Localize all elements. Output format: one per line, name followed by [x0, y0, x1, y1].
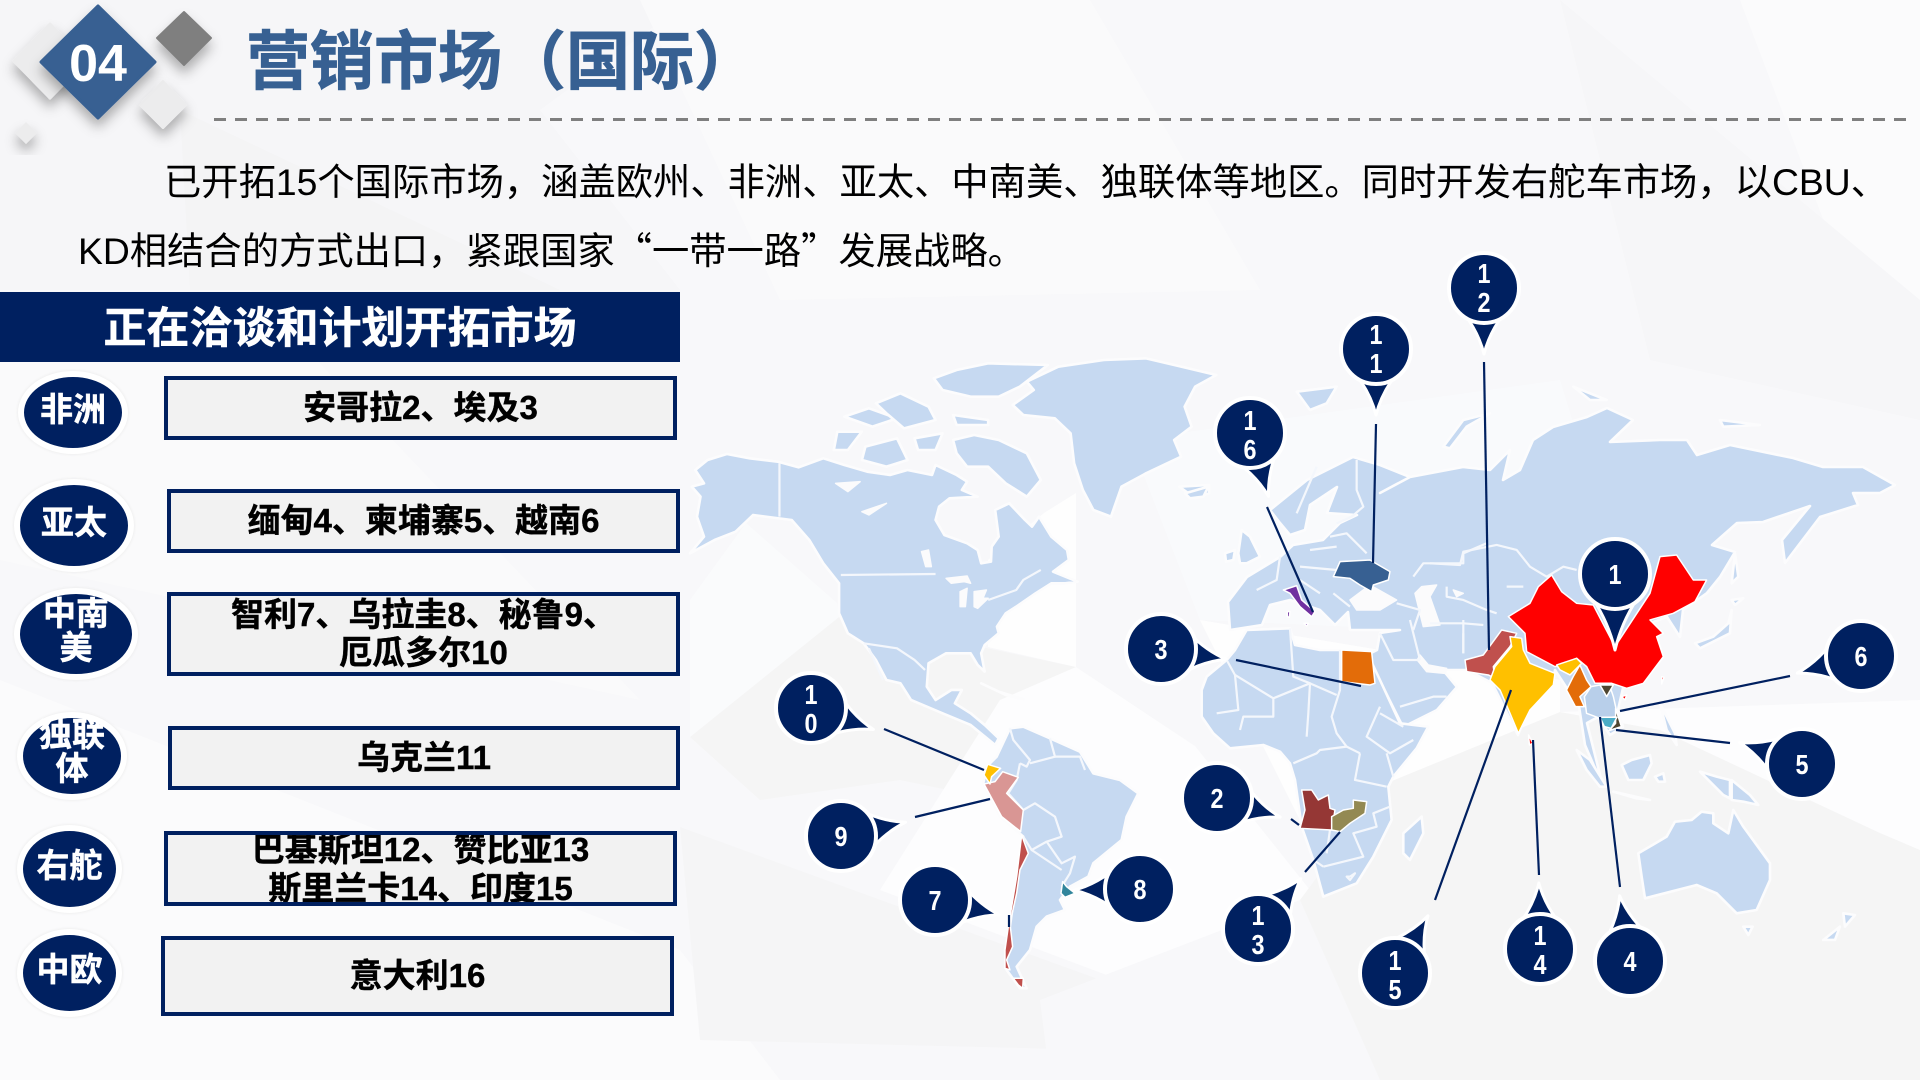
pin 10: 1: [804, 679, 818, 710]
leader lines: [884, 362, 1790, 927]
pin 12: 1: [1478, 258, 1490, 289]
row: Africa label: [18, 371, 128, 454]
pin 10: 0: [804, 708, 818, 739]
pin 9: 9: [834, 821, 848, 852]
land: North America and Greenland: [690, 358, 1216, 745]
row: China-Europe markets: 意大利16: [350, 957, 485, 994]
panel header: [0, 292, 680, 362]
pin 13: [1223, 859, 1324, 964]
pin 3: 3: [1154, 634, 1168, 665]
pin 2: 2: [1210, 783, 1224, 814]
row: Africa markets: 安哥拉2、埃及3: [303, 389, 538, 426]
lakes of North America: [836, 482, 988, 608]
pin 7: [900, 865, 1006, 944]
pin 5: 5: [1796, 749, 1808, 780]
land: Japan and east Asian islands: [1573, 387, 1760, 648]
pin 10: [776, 673, 883, 758]
pin 11: 1: [1370, 319, 1382, 350]
row: China-Europe label: 中欧: [36, 951, 102, 988]
country borders: [1217, 620, 1463, 880]
intro paragraph: [78, 161, 1888, 275]
pin 13: 3: [1252, 929, 1264, 960]
pin 14: [1505, 882, 1575, 984]
pin 6: 6: [1854, 641, 1868, 672]
row: Asia Pacific label: 亚太: [41, 504, 107, 540]
row: CIS label: 独联: [39, 716, 105, 753]
row: Asia Pacific markets: 缅甸4、柬埔寨5、越南6: [247, 502, 600, 539]
row: Latin America label: 中南: [43, 595, 109, 632]
pin 7: 7: [928, 885, 942, 916]
world map: [690, 358, 1895, 988]
pin 15: [1360, 901, 1454, 1008]
intro paragraph: 已开拓15个国际市场，涵盖欧州、非洲、亚太、中南美、独联体等地区。同时开发右舵车市场，以CBU、: [164, 161, 1888, 203]
highlighted markets: south-east Asia and Sri Lanka: [1529, 665, 1621, 745]
pin 3: [1126, 614, 1231, 689]
pin 14: 4: [1534, 949, 1547, 980]
highlighted markets: China, Pakistan, India: [1465, 555, 1707, 733]
pin 8: 8: [1134, 874, 1146, 905]
land: Africa and Madagascar: [1202, 628, 1428, 897]
intro paragraph: KD相结合的方式出口，紧跟国家“一带一路”发展战略。: [78, 221, 1025, 275]
pin 2: [1182, 763, 1289, 846]
land: Eurasia: [1228, 408, 1895, 787]
row: right-hand drive markets: [164, 831, 677, 906]
highlighted markets: Peru, Ecuador, Chile, Uruguay: [984, 764, 1075, 988]
row: CIS markets: 乌克兰11: [357, 739, 491, 776]
pin 15: 1: [1388, 945, 1402, 976]
row: right-hand drive label: 右舵: [36, 847, 102, 884]
section badge: 04: [8, 4, 216, 155]
South America: [983, 727, 1138, 988]
pin 8: [1073, 854, 1175, 924]
row: Asia Pacific markets: [167, 489, 680, 553]
pin 9: [806, 793, 912, 871]
section badge: 04: 04: [69, 35, 127, 93]
row: Latin America label: [14, 588, 138, 680]
pin 16: 6: [1244, 434, 1256, 465]
pin 4: 4: [1624, 946, 1637, 977]
pin 14: 1: [1534, 920, 1546, 951]
pin 6: [1789, 621, 1896, 702]
panel header: 正在洽谈和计划开拓市场: [104, 305, 576, 353]
pin 4: [1590, 891, 1665, 996]
pin 13: 1: [1252, 900, 1264, 931]
highlighted markets: Egypt, Angola, Zambia: [1300, 650, 1375, 832]
row: Asia Pacific label: [14, 479, 134, 572]
row: Latin America markets: [167, 592, 680, 676]
pin 11: 1: [1370, 348, 1382, 379]
row: CIS label: [17, 712, 127, 800]
pin 16: 1: [1244, 405, 1256, 436]
pin 11: [1341, 314, 1411, 415]
row: China-Europe label: [17, 929, 122, 1017]
row: China-Europe markets: [161, 936, 674, 1016]
row: right-hand drive markets: 斯里兰卡14、印度15: [268, 870, 573, 906]
row: right-hand drive markets: 巴基斯坦12、赞比亚13: [252, 831, 589, 868]
inland seas of Eurasia: [1350, 585, 1463, 627]
row: CIS markets: [168, 726, 680, 790]
highlighted markets: Ukraine, Italy: [1283, 560, 1390, 626]
pin 5: [1730, 714, 1837, 799]
row: Latin America label: 美: [60, 629, 92, 666]
row: Latin America markets: 厄瓜多尔10: [339, 634, 508, 671]
pin 12: [1449, 253, 1519, 354]
row: CIS label: 体: [56, 750, 88, 787]
title: 营销市场（国际）: [246, 26, 758, 98]
pin 12: 2: [1478, 287, 1490, 318]
row: right-hand drive label: [17, 825, 122, 913]
pin 15: 5: [1388, 974, 1402, 1005]
dashed divider: [214, 118, 1908, 121]
pin 16: [1215, 398, 1297, 505]
row: Latin America markets: 智利7、乌拉圭8、秘鲁9、: [231, 596, 616, 633]
row: Africa label: 非洲: [40, 390, 106, 428]
pin 1: [1580, 539, 1650, 650]
pin 1: 1: [1608, 559, 1622, 590]
land: Oceania and south-east Asian islands: [1577, 703, 1855, 940]
row: Africa markets: [164, 376, 677, 440]
